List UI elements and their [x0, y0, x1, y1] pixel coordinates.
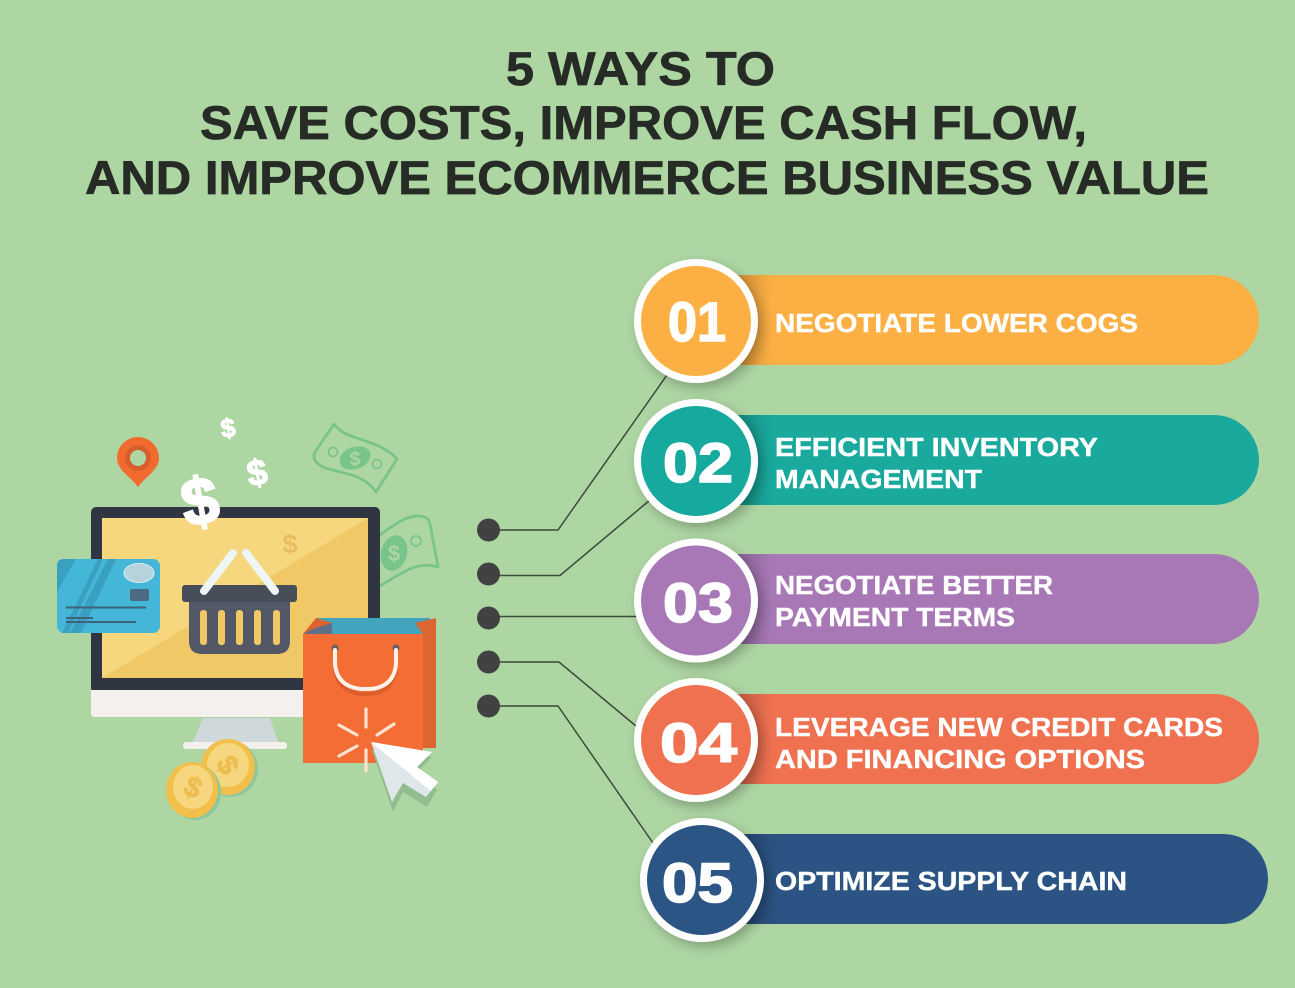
icon: faint bill top: [314, 424, 397, 492]
icon: dollar signs: $: [175, 461, 224, 541]
connector lines: [488, 375, 667, 843]
icon: faint bill right: [377, 516, 438, 587]
illustration: ecommerce computer: [57, 412, 438, 820]
connector dots: [477, 518, 500, 718]
title: [85, 42, 1209, 204]
icon: dollar signs: $: [219, 412, 238, 444]
item 03: [638, 542, 1259, 659]
item 01: [638, 262, 1259, 380]
item 02: 02: [663, 431, 733, 494]
icon: coins: $: [209, 751, 245, 780]
item 04: [638, 682, 1259, 798]
monitor: [91, 507, 380, 749]
icon: shopping bag: [303, 618, 436, 771]
icon: location pin: [117, 437, 159, 487]
item 05: [644, 822, 1268, 938]
icon: faint bill top: $: [350, 449, 361, 470]
item 03: NEGOTIATE BETTER: [775, 570, 1053, 600]
title: 5 WAYS TO: [506, 42, 775, 95]
item 03: 03: [663, 571, 733, 634]
item 01: NEGOTIATE LOWER COGS: [775, 308, 1138, 338]
item 03: PAYMENT TERMS: [775, 602, 1015, 632]
item 05: 05: [662, 851, 733, 914]
icon: faint bill right: $: [388, 541, 400, 566]
icon: shopping basket: [182, 553, 297, 654]
item 02: MANAGEMENT: [775, 464, 982, 494]
item 02: EFFICIENT INVENTORY: [775, 432, 1098, 462]
icon: coins: [166, 739, 258, 820]
title: AND IMPROVE ECOMMERCE BUSINESS VALUE: [85, 151, 1209, 204]
icon: faint dollar on screen: $: [282, 529, 298, 559]
icon: dollar signs: [175, 412, 271, 541]
icon: credit card: [57, 559, 160, 633]
item 02: [638, 402, 1259, 520]
item 05: OPTIMIZE SUPPLY CHAIN: [775, 866, 1127, 896]
icon: cursor arrow: [371, 742, 438, 812]
item 04: 04: [660, 711, 737, 774]
icon: coins: $: [179, 770, 207, 806]
item 01: 01: [668, 290, 726, 353]
icon: dollar signs: $: [244, 451, 271, 494]
title: SAVE COSTS, IMPROVE CASH FLOW,: [200, 96, 1087, 149]
item 04: LEVERAGE NEW CREDIT CARDS: [775, 712, 1223, 742]
item 04: AND FINANCING OPTIONS: [775, 744, 1145, 774]
